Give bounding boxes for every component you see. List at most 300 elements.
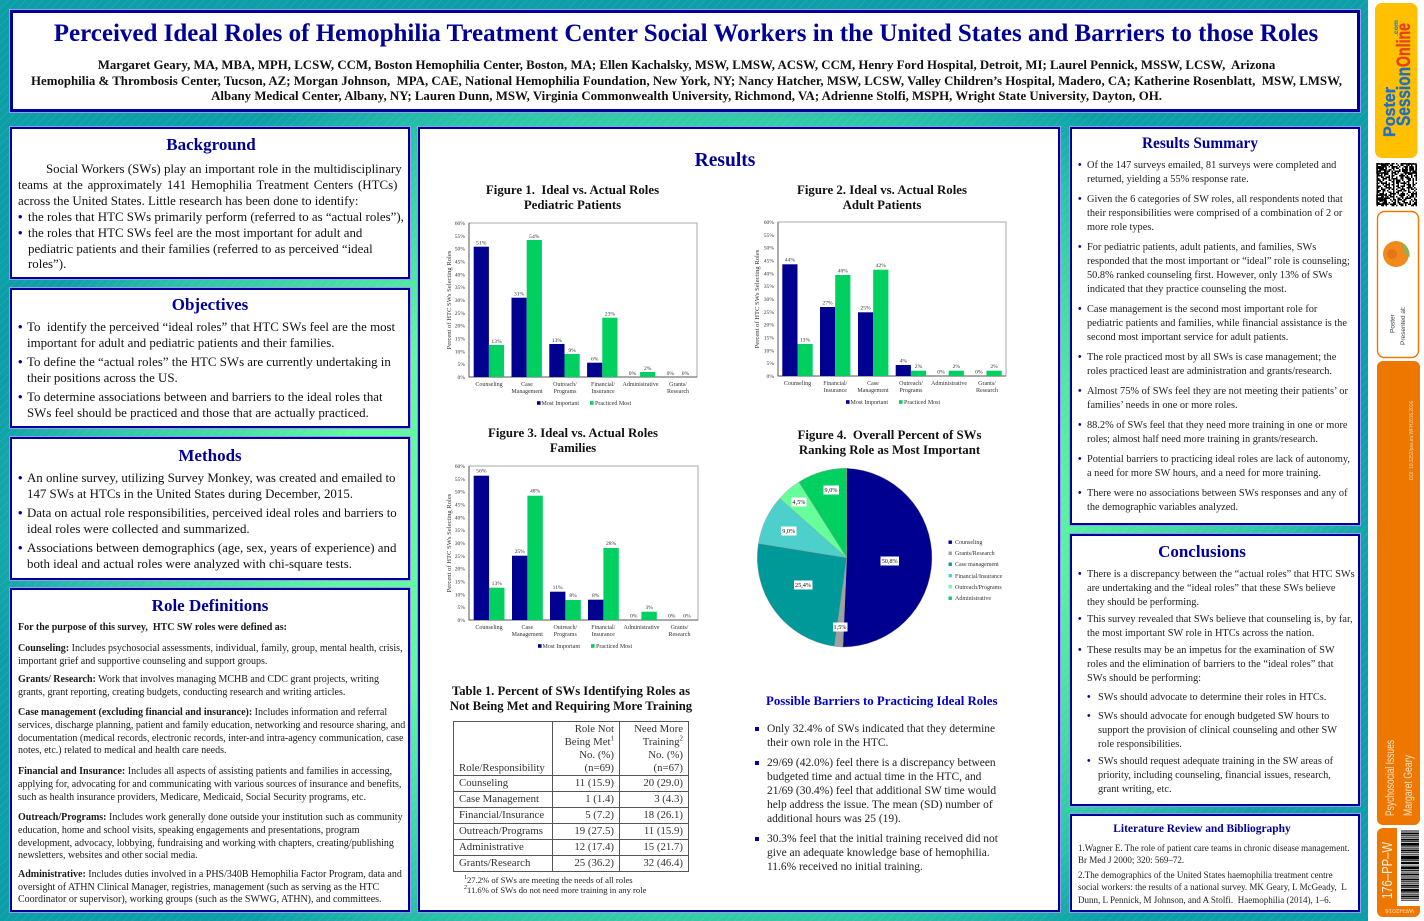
bar chart: figure 1 pediatric patients: 0% [629,371,637,377]
table 1: 20 (29.0) [643,777,683,789]
background text: • [18,226,23,240]
bar chart: figure 1 pediatric patients: 23% [605,312,615,318]
bar chart: figure 1 pediatric patients: 5% [458,362,465,368]
table 1: Outreach/Programs [459,825,543,837]
table 1: Financial/Insurance [459,809,544,821]
bar chart: figure 1 pediatric patients: 13% [552,338,562,344]
role definitions text: grants, grant reporting, creating budgets, conducting research and writing articles. [18,687,345,698]
bar chart: figure 1 pediatric patients: 40% [455,272,465,278]
bar chart: figure 2 adult patients: 2% [990,364,998,370]
barriers list: budgeted time and actual time in the HTC, and [767,771,981,783]
objectives list: To define the “actual roles” the HTC SWs are currently undertaking in [27,355,391,369]
table 1: 18 (26.1) [643,809,683,821]
title: Perceived Ideal Roles of Hemophilia Treatment Center Social Workers in the United States and Barriers to those Roles [54,20,1318,47]
role definitions text: Coordinator or supervisor), working groups (such as the SWWG, ATHN), and committees. [18,894,382,905]
results summary list: roles; almost half need more training in grants/research. [1087,434,1318,445]
background text: teams at the approximately 141 Hemophilia Treatment Centers (HTCs) [18,178,397,192]
role definitions text: Grants/ Research: Work that involves managing MCHB and CDC grant projects, writing [18,674,379,685]
barriers list: Only 32.4% of SWs indicated that they determine [767,723,995,735]
bar chart: figure 3 families: 11% [553,585,563,591]
role definitions text: important grief and supportive counseling and support groups. [18,656,267,667]
conclusions list: SWs should advocate for enough budgeted SW hours to [1098,711,1329,722]
bar chart: figure 1 pediatric patients: 31% [514,292,525,298]
methods list: • [18,541,23,555]
bar chart: figure 2 adult patients: 50% [764,246,774,252]
bar chart: figure 1 pediatric patients: 25% [455,311,465,317]
conclusions list: role responsibilities. [1098,739,1182,750]
bar chart: figure 3 families: 10% [455,592,465,598]
bar chart: figure 3 families: Most Important [542,644,580,650]
bar chart: figure 1 pediatric patients: 20% [455,324,465,330]
table 1 title [450,684,692,713]
badge: PosterSessionOnline logo: Poster [1380,87,1399,137]
bar chart: figure 3 families: Outreach/ [553,625,577,631]
heading: conclusions: Conclusions [1158,542,1246,561]
barriers list: give an adequate knowledge base of hemophilia. [767,847,990,859]
figure 2 title [797,183,967,212]
role definitions text: Counseling: Includes psychosocial assessments, individual, family, group, mental health, crisis, [18,643,403,654]
results summary list: • [1078,454,1082,465]
bar chart: figure 3 families: 28% [606,541,617,547]
bar chart: figure 2 adult patients: Management [857,388,889,394]
bar chart: figure 1 pediatric patients: 6% [591,356,599,362]
panel: results summary [1070,127,1360,525]
references [1078,843,1349,905]
heading: role definitions: Role Definitions [152,596,268,615]
methods list: • [18,471,23,485]
badge: topic and presenter strip: Margaret Geary [1403,755,1415,816]
bar chart: figure 2 adult patients: 60% [764,220,774,226]
references: 2.The demographics of the United States haemophilia treatment centre [1078,870,1333,880]
bar chart: figure 1 pediatric patients: Outreach/ [553,382,577,388]
heading: possible barriers: Possible Barriers to Practicing Ideal Roles [766,694,998,708]
bar chart: figure 3 families: 15% [455,580,465,586]
pie chart: figure 4 [757,468,1003,647]
authors: Hemophilia & Thrombosis Center, Tucson, AZ; Morgan Johnson, MPA, CAE, National Hemophilia Foundation, New York, NY; Nancy Hatcher, MSW, LCSW, Valley Children’s Hospital, Madero, CA; Katherine Rosenblatt, MSW, LMSW, [31,74,1342,88]
bar chart: figure 1 pediatric patients: Programs [554,389,577,395]
methods list: ideal roles were collected and summarized. [27,522,250,536]
table 1: 5 (7.2) [585,809,614,821]
bar chart: figure 3 families: Practiced Most [596,644,632,650]
bar chart: figure 2 adult patients: 30% [764,297,774,303]
figure 2 title: Figure 2. Ideal vs. Actual Roles [797,183,967,197]
authors [31,58,1342,103]
bar chart: figure 3 families: 56% [476,468,487,474]
background text: pediatric patients and their families (referred to as perceived “ideal [28,242,373,256]
pie chart: figure 4: Grants/Research [955,551,995,557]
figure 4 title: Figure 4. Overall Percent of SWs [798,428,981,442]
bar chart: figure 1 pediatric patients: 30% [455,298,465,304]
badge: topic and presenter strip: DOI: 10.3252/pso.eu.WFH2016.2016 [1409,401,1415,480]
badge: poster number and barcode [1377,828,1420,917]
bar chart: figure 2 adult patients: Administrative [931,381,967,387]
pie chart: figure 4: Financial/Insurance [955,574,1003,580]
badge: PosterSessionOnline logo [1375,3,1418,158]
bar chart: figure 3 families: 50% [455,490,465,496]
bar chart: figure 1 pediatric patients: Management [511,389,543,395]
table 1: 3 (4.3) [654,793,683,805]
bar chart: figure 1 pediatric patients: Percent of HTC SWs Selecting Roles [446,250,453,349]
background text: Social Workers (SWs) play an important role in the multidisciplinary [46,162,402,176]
figure 3 title: Figure 3. Ideal vs. Actual Roles [488,426,658,440]
bar chart: figure 1 pediatric patients: Most Important [542,401,579,407]
badge: topic and presenter strip [1377,361,1420,825]
objectives list [18,320,395,420]
table 1: Grants/Research [459,857,530,869]
methods list: both ideal and actual roles were analyzed with chi-square tests. [27,557,352,571]
results summary list: • [1078,160,1082,171]
bar chart: figure 2 adult patients: 40% [764,271,774,277]
results summary list: For pediatric patients, adult patients, and families, SWs [1087,242,1316,253]
role definitions text: education, home and school visits, speaking engagements and presentations, program [18,825,360,836]
bar chart: figure 1 pediatric patients: 0% [682,371,690,377]
results summary list: 88.2% of SWs feel that they need more training in one or more [1087,420,1348,431]
bar chart: figure 2 adult patients: Practiced Most [904,400,940,406]
role definitions text: oversight of ATHN Clinical Manager, registries, management (such as serving as the HTC [18,882,379,893]
background text: the roles that HTC SWs feel are the most important for adult and [28,226,362,240]
bar chart: figure 1 pediatric patients: Grants/ [669,382,687,388]
figure 1 title: Pediatric Patients [524,198,621,212]
bar chart: figure 1 pediatric patients: 54% [529,234,540,240]
bar chart: figure 3 families: Management [512,632,543,638]
barriers list: 11.6% received no initial training. [767,861,923,873]
bar chart: figure 2 adult patients: 10% [764,348,774,354]
bar chart: figure 2 adult patients: 15% [764,336,774,342]
bar chart: figure 3 families: 25% [515,549,525,555]
bar chart: figure 2 adult patients: Research [976,388,998,394]
results summary list: returned, yielding a 55% response rate. [1087,174,1249,185]
bar chart: figure 2 adult patients: Outreach/ [899,381,923,387]
bar chart: figure 3 families: 55% [455,477,465,483]
bar chart: figure 2 adult patients: 4% [900,358,907,364]
results summary list: families’ needs in one or more roles. [1087,400,1238,411]
pie chart: figure 4: Counseling [955,540,982,546]
conclusions list: SWs should advocate to determine their roles in HTCs. [1098,692,1326,703]
pie chart: figure 4: Outreach/Programs [955,585,1002,591]
figure 1 title: Figure 1. Ideal vs. Actual Roles [486,183,659,197]
bar chart: figure 2 adult patients: 0% [767,374,774,380]
pie chart: figure 4: 1,5% [834,624,846,631]
methods list: An online survey, utilizing Survey Monkey, was created and emailed to [27,471,395,485]
objectives list: SWs feel should be practiced and those that are actually practiced. [27,406,369,420]
bar chart: figure 3 families: Financial/ [591,625,616,631]
table 1: 12 (17.4) [574,841,614,853]
panel: literature review and bibliography [1070,814,1360,912]
panel: title header [10,10,1360,112]
results summary list: more role types. [1087,222,1154,233]
role definitions text: services, discharge planning, patient and family education, networking and resource sharing, and [18,720,405,731]
bar chart: figure 1 pediatric patients: Administrative [622,382,659,388]
table 1: 11 (15.9) [575,777,614,789]
background text: roles”). [28,257,66,271]
bar chart: figure 2 adult patients: 0% [975,370,983,376]
bar chart: figure 1 pediatric patients: 9% [568,348,576,354]
heading: objectives: Objectives [172,295,248,314]
bar chart: figure 3 families: Administrative [624,625,660,631]
bar chart: figure 2 adult patients: 25% [764,310,774,316]
table 1: 15 (21.7) [643,841,683,853]
results summary list: • [1078,194,1082,205]
table footnotes [464,875,646,895]
bar chart: figure 3 families: Counseling [475,625,503,631]
bar chart: figure 2 adult patients: 55% [764,233,774,239]
panel: objectives [10,288,410,428]
methods list [18,471,397,571]
bar chart: figure 1 pediatric patients: Practiced Most [595,401,631,407]
bar chart: figure 3 families: 0% [668,614,676,620]
background text: the roles that HTC SWs primarily perform (referred to as “actual roles”), [28,210,404,224]
bar chart: figure 2 adult patients: 2% [953,364,960,370]
table 1: Case Management [459,793,539,805]
heading: results summary: Results Summary [1142,135,1258,152]
results summary list: second most important service for adult patients. [1087,332,1288,343]
objectives list: To identify the perceived “ideal roles” that HTC SWs feel are the most [27,320,395,334]
table 1: Being Met1 [565,734,614,748]
bar chart: figure 3 families: 13% [492,581,502,587]
conclusions list: grant writing, etc. [1098,784,1172,795]
objectives list: • [18,320,23,334]
results summary list: pediatric patients and families, while financial assistance is the [1087,318,1347,329]
conclusions list: • [1087,692,1091,703]
pie chart: figure 4: 4,5% [793,499,805,506]
badge: presented at: Poster [1390,313,1396,333]
conclusions list [1078,569,1355,795]
conclusions list: support the provision of clinical counseling and other SW [1098,725,1337,736]
barriers list: 21/69 (30.4%) feel that additional SW time would [767,785,996,797]
authors: Albany Medical Center, Albany, NY; Lauren Dunn, MSW, Virginia Commonwealth University, Richmond, VA; Adrienne Stolfi, MSPH, Wright State University, Dayton, OH. [211,89,1162,103]
conclusions list: • [1078,645,1082,656]
table 1: 11 (15.9) [644,825,683,837]
results summary list: roles practiced least are administration and grants/research. [1087,366,1332,377]
table 1: Role Not [575,723,614,735]
bar chart: figure 1 pediatric patients: 45% [455,260,465,266]
table 1: Need More [634,723,683,735]
conclusions list: • [1078,569,1082,580]
bar chart: figure 2 adult patients: 42% [876,263,886,269]
results summary list: • [1078,420,1082,431]
results summary list: their responsibilities were comprised of a combination of 2 or [1087,208,1342,219]
results summary list: responded that the most important or “ideal” role is counseling; [1087,256,1350,267]
conclusions list: SWs should be performing: [1087,673,1201,684]
bar chart: figure 3 families: 45% [455,502,465,508]
panel: methods [10,437,410,580]
bar chart: figure 2 adult patients: Insurance [824,388,847,394]
role definitions text: such as health insurance providers, Medicare, Medicaid, Social Security programs, etc. [18,792,366,803]
role definitions text: Case management (excluding financial and insurance): Includes information and referral [18,707,387,718]
bar chart: figure 1 pediatric patients: Insurance [591,389,615,395]
badge: PosterSessionOnline logo: Session [1394,67,1415,126]
table 1: 1 (1.4) [585,793,614,805]
bar chart: figure 2 adult patients: Most Important [850,400,888,406]
badge: topic and presenter strip: Psychosocial Issues [1385,740,1397,816]
QR code [1376,163,1418,206]
authors: Margaret Geary, MA, MBA, MPH, LCSW, CCM, Boston Hemophilia Center, Boston, MA; Ellen Kachalsky, MSW, LMSW, ACSW, CCM, Henry Ford Hospital, Detroit, MI; Laurel Pennick, MSSW, LCSW, Arizona [98,58,1275,72]
bar chart: figure 3 families: Grants/ [671,625,689,631]
background text: • [18,210,23,224]
results summary list: Of the 147 surveys emailed, 81 surveys were completed and [1087,160,1336,171]
table 1: 32 (46.4) [643,857,683,869]
results summary list: The role practiced most by all SWs is case management; the [1087,352,1336,363]
bar chart: figure 2 adult patients: 20% [764,323,774,329]
table 1 title: Not Being Met and Requiring More Training [450,699,692,713]
bar chart: figure 3 families: Percent of HTC SWs Selecting Roles [446,493,453,592]
bar chart: figure 3 families [446,464,698,650]
bar chart: figure 1 pediatric patients: 0% [667,371,674,377]
conclusions list: roles and the elimination of barriers to the “ideal roles” that [1087,659,1333,670]
bar chart: figure 3 families: 40% [455,515,465,521]
results summary list: Almost 75% of SWs feel they are not meeting their patients’ or [1087,386,1348,397]
bar chart: figure 2 adult patients: Financial/ [823,381,848,387]
bar chart: figure 1 pediatric patients: Financial/ [591,382,615,388]
role definitions text: Financial and Insurance: Includes all aspects of assisting patients and families in accessing, [18,766,392,777]
heading: results: Results [695,150,755,171]
bar chart: figure 1 pediatric patients: 0% [458,375,465,381]
results summary list [1078,160,1350,513]
bar chart: figure 3 families: 48% [530,488,541,494]
pie chart: figure 4: 25,4% [795,582,811,589]
badge: PosterSessionOnline logo: .com [1394,20,1400,36]
bar chart: figure 2 adult patients: 45% [764,258,774,264]
bar chart: figure 2 adult patients: 35% [764,284,774,290]
table 1: Training2 [643,734,683,748]
objectives list: • [18,390,23,404]
methods list: • [18,506,23,520]
conclusions list: • [1078,614,1082,625]
bar chart: figure 2 adult patients: Programs [900,388,923,394]
results summary list: • [1078,488,1082,499]
figure 2 title: Adult Patients [843,198,921,212]
pie chart: figure 4: 50,8% [882,558,898,565]
table 1: Role/Responsibility [459,762,545,774]
bar chart: figure 3 families: 20% [455,567,465,573]
barriers list [755,723,998,873]
bar chart: figure 2 adult patients: 25% [860,306,871,312]
barriers list: help address the issue. The mean (SD) number of [767,799,993,811]
bar chart: figure 1 pediatric patients: Research [667,389,689,395]
references: social workers: the results of a national survey. MK Geary, L McGeady, L [1078,882,1347,892]
references: Dunn, L Pennick, M Johnson, and A Stolfi. Haemophilia (2014), 1–6. [1078,895,1331,905]
figure 4 title: Ranking Role as Most Important [799,443,980,457]
objectives list: To determine associations between and barriers to the ideal roles that [27,390,383,404]
bar chart: figure 3 families: 25% [455,554,465,560]
barriers list: their own role in the HTC. [767,737,888,749]
results summary list: • [1078,242,1082,253]
role definitions text: development, advocacy, lobbying, fundraising and working with chapters, creating/publishing [18,838,394,849]
panel: role definitions [10,588,410,912]
role definitions text [18,622,406,905]
bar chart: figure 3 families: 0% [630,614,638,620]
results summary list: Potential barriers to practicing ideal roles are lack of autonomy, [1087,454,1350,465]
bar chart: figure 2 adult patients: 2% [915,364,923,370]
badge: presented at [1378,212,1418,358]
bar chart: figure 3 families: Programs [554,632,577,638]
pie chart: figure 4: Case management [955,562,999,568]
bar chart: figure 3 families: 8% [569,593,577,599]
results summary list: • [1078,386,1082,397]
bar chart: figure 1 pediatric patients: 55% [455,234,465,240]
results summary list: the demographic variables analyzed. [1087,502,1238,513]
background text: across the United States. Little research has been done to identify: [18,194,358,208]
bar chart: figure 2 adult patients: 44% [785,258,795,264]
figure 3 title: Families [550,441,596,455]
bar chart: figure 3 families: 30% [455,541,465,547]
objectives list: their positions across the US. [27,371,178,385]
conclusions list: are undertaking and the “ideal roles” that these SWs believe [1087,583,1335,594]
bar chart: figure 1 pediatric patients: 50% [455,247,465,253]
objectives list: • [18,355,23,369]
references: Br Med J 2000; 320: 569–72. [1078,855,1184,865]
conclusions list: they should be performing. [1087,597,1199,608]
bar chart: figure 3 families: 35% [455,528,465,534]
bar chart: figure 1 pediatric patients: Case [521,382,533,388]
bar chart: figure 1 pediatric patients: 10% [455,349,465,355]
results summary list: a need for more SW hours, and a need for more training. [1087,468,1321,479]
background text [18,162,404,271]
bar chart: figure 1 pediatric patients: 13% [491,339,502,345]
table 1: (n=69) [585,762,614,774]
results summary list: 50.8% ranked counseling first. However, only 13% of SWs [1087,270,1332,281]
bar chart: figure 2 adult patients: Percent of HTC SWs Selecting Roles [754,249,761,348]
bar chart: figure 3 families: 60% [455,464,465,470]
panel: results [418,127,1060,912]
role definitions text: Outreach/Programs: Includes work generally done outside your institution such as community [18,812,403,823]
role definitions text: Administrative: Includes duties involved in a PHS/340B Hemophilia Factor Program, data and [18,869,402,880]
panel: background [10,127,410,279]
badge: PosterSessionOnline logo: Online [1394,23,1415,67]
table 1: Administrative [459,841,524,853]
table 1: (n=67) [654,762,683,774]
conclusions list: These results may be an impetus for the examination of SW [1087,645,1335,656]
methods list: Associations between demographics (age, sex, years of experience) and [27,541,396,555]
bar chart: figure 2 adult patients: 5% [767,361,774,367]
barriers list: additional hours was 25 (19). [767,813,901,825]
panel: conclusions [1070,534,1360,806]
results summary list: indicated that they practice counseling the most. [1087,284,1287,295]
methods list: 147 SWs at HTCs in the United States during December, 2015. [27,487,353,501]
bar chart: figure 2 adult patients: Counseling [784,381,811,387]
conclusions list: This survey revealed that SWs believe that counseling is, by far, [1087,614,1353,625]
bar chart: figure 2 adult patients: Case [867,381,879,387]
bar chart: figure 1 pediatric patients: 35% [455,285,465,291]
badge: presented at: Presented at: [1400,306,1407,345]
results summary list: • [1078,352,1082,363]
role definitions text: documentation (medical records, electronic records, inter-and intra-agency communication, case [18,733,403,744]
bar chart: figure 1 pediatric patients: Counseling [475,382,503,388]
pie chart: figure 4: Administrative [955,596,991,602]
conclusions list: SWs should request adequate training in the SW areas of [1098,756,1333,767]
bar chart: figure 2 adult patients: Grants/ [978,381,996,387]
conclusions list: • [1087,711,1091,722]
bar chart: figure 3 families: 8% [592,593,600,599]
barriers list: 30.3% feel that the initial training received did not [767,833,998,845]
heading: literature review: Literature Review and Bibliography [1113,823,1291,835]
bar chart: figure 2 adult patients [754,220,1006,406]
badge: poster number and barcode: 176–PP–W [1380,842,1396,899]
table 1: Counseling [459,777,508,789]
results summary list: Case management is the second most important role for [1087,304,1317,315]
conclusions list: There is a discrepancy between the “actual roles” that HTC SWs [1087,569,1355,580]
figure 4 title [798,428,982,457]
table 1: 19 (27.5) [574,825,614,837]
figure 3 title [488,426,658,455]
table 1: No. (%) [648,749,683,761]
bar chart: figure 2 adult patients: 40% [838,268,848,274]
bar chart: figure 3 families: 5% [458,605,465,611]
conclusions list: • [1087,756,1091,767]
bar chart: figure 3 families: 0% [683,614,691,620]
bar chart: figure 1 pediatric patients: 2% [644,366,652,372]
table 1 title: Table 1. Percent of SWs Identifying Roles as [452,684,690,698]
